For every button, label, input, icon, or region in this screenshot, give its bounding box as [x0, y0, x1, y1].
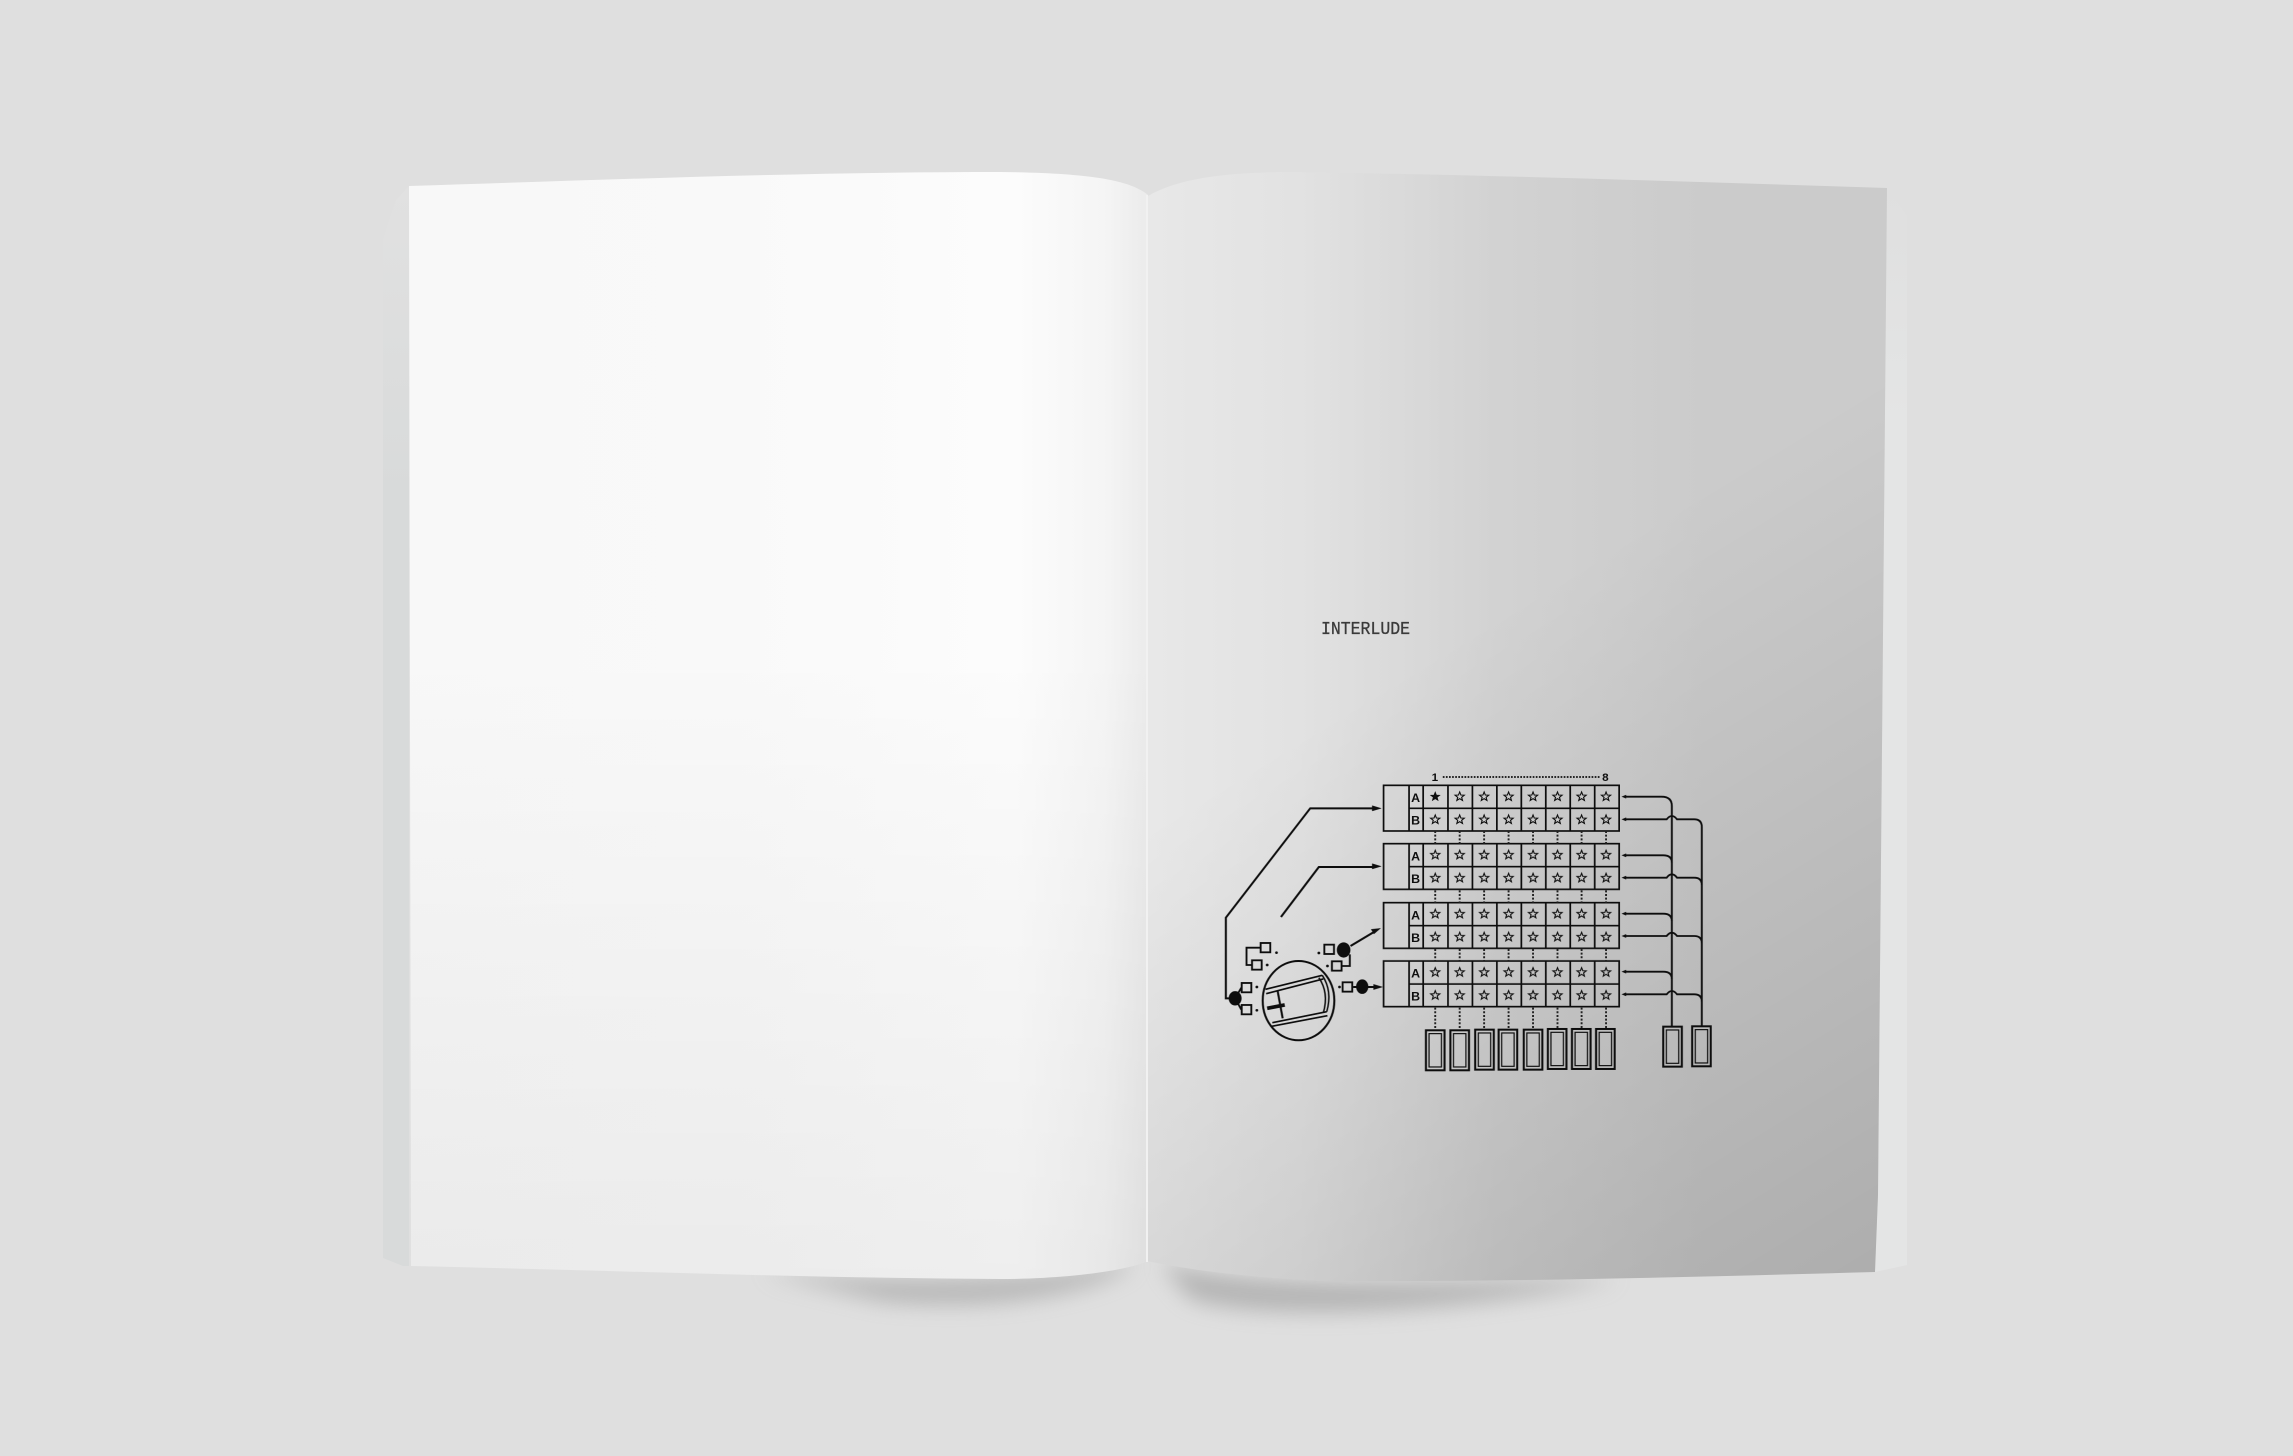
sequencer row 2: B	[1411, 872, 1420, 886]
left input arrows	[1226, 806, 1383, 998]
sequencer row 3: B	[1411, 931, 1420, 945]
circular inset detail	[1263, 961, 1334, 1040]
step range label 1 to 8: 1	[1432, 772, 1439, 784]
shadow under left page	[760, 1262, 1136, 1303]
sequencer row 2	[1384, 844, 1619, 889]
sequencer row 2: A	[1411, 850, 1420, 863]
step range label 1 to 8: 8	[1602, 772, 1609, 784]
eight step output modules	[1426, 1029, 1615, 1070]
left page edge stack	[383, 186, 409, 1266]
two channel output modules	[1663, 1026, 1711, 1067]
sequencer row 1	[1384, 785, 1619, 831]
sequencer row 1: B	[1411, 814, 1420, 828]
sequencer row 3: A	[1411, 908, 1420, 922]
sequencer row 4: B	[1411, 989, 1420, 1003]
step range label 1 to 8	[1432, 772, 1609, 784]
diagram: sequencer schematic	[1226, 772, 1711, 1070]
sequencer row 1: A	[1411, 791, 1420, 805]
sequencer row 4: A	[1411, 967, 1420, 981]
dotted step connectors	[1435, 831, 1606, 1030]
book spine	[1146, 195, 1148, 1262]
sequencer row 3	[1384, 903, 1619, 948]
sequencer row 4	[1384, 961, 1619, 1007]
right page edge stack	[1875, 188, 1907, 1272]
control panel knobs and switches	[1230, 943, 1367, 1014]
shadow under right page	[1160, 1262, 1620, 1311]
left page	[409, 172, 1148, 1279]
right page	[1147, 172, 1887, 1281]
right bus wiring with arrows	[1622, 795, 1702, 1027]
heading: INTERLUDE: INTERLUDE	[1321, 620, 1410, 640]
